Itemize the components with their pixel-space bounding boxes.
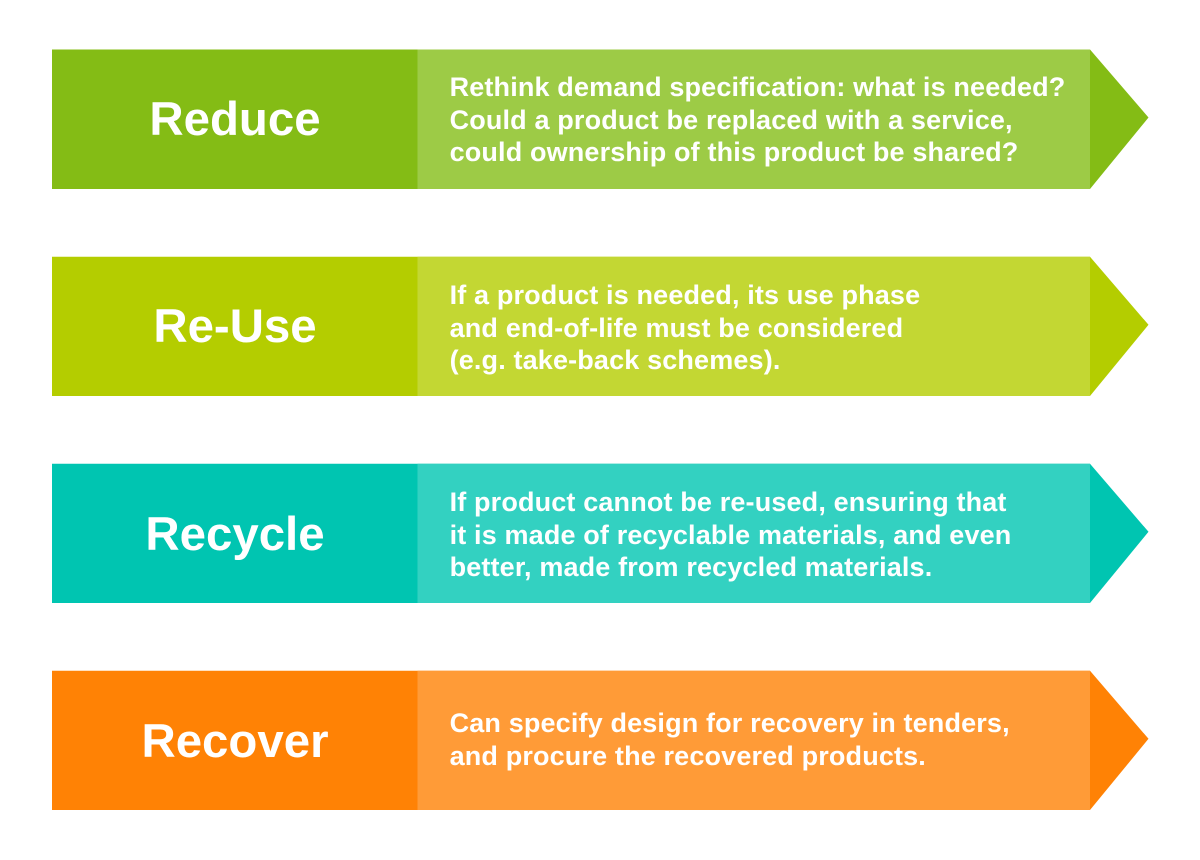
text: Recover description: and procure the recovered products. bbox=[450, 741, 926, 771]
text: Reduce description: Could a product be replaced with a service, bbox=[450, 105, 1013, 135]
text: Reduce description bbox=[450, 72, 1065, 167]
heading: Recover: Recover bbox=[141, 715, 329, 768]
text: Re-Use description: If a product is needed, its use phase bbox=[450, 280, 920, 310]
text: Recycle description: it is made of recyclable materials, and even bbox=[450, 520, 1011, 550]
text: Recycle description bbox=[450, 487, 1011, 582]
heading: Recycle: Recycle bbox=[145, 508, 325, 561]
panel: Re-Use arrow bbox=[52, 256, 1148, 396]
text: Reduce description: could ownership of this product be shared? bbox=[450, 137, 1018, 167]
panel: Recover arrow bbox=[52, 670, 1148, 810]
text: Re-Use description bbox=[450, 280, 920, 375]
text: Reduce description: Rethink demand specification: what is needed? bbox=[450, 72, 1065, 102]
text: Recycle description: better, made from recycled materials. bbox=[450, 552, 932, 582]
panel: Reduce arrow bbox=[52, 50, 1148, 189]
heading: Reduce: Reduce bbox=[149, 93, 321, 146]
text: Recover description: Can specify design for recovery in tenders, bbox=[450, 708, 1010, 738]
text: Recycle description: If product cannot be re-used, ensuring that bbox=[450, 487, 1007, 517]
panel: Recycle arrow bbox=[52, 464, 1148, 603]
text: Recover description bbox=[450, 708, 1010, 771]
text: Re-Use description: (e.g. take-back schemes). bbox=[450, 345, 780, 375]
heading: Re-Use: Re-Use bbox=[153, 300, 317, 353]
text: Re-Use description: and end-of-life must be considered bbox=[450, 313, 903, 343]
